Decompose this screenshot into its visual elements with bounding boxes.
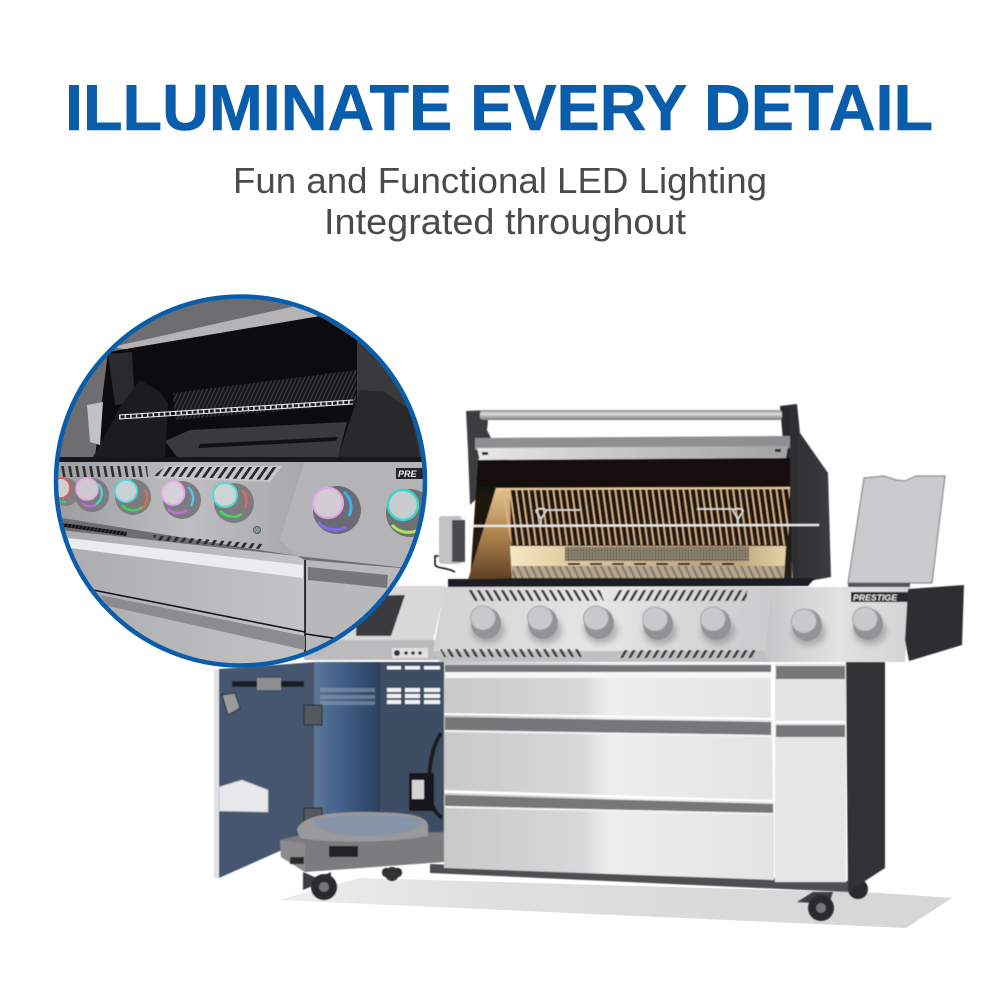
warming rack — [496, 488, 790, 545]
circle blue border — [56, 296, 425, 666]
inset base line — [50, 457, 435, 463]
inset rotisserie — [119, 400, 353, 419]
lower drawer — [444, 793, 774, 880]
inset firebox — [95, 316, 368, 457]
upper vents — [468, 590, 747, 601]
rotisserie motor — [435, 516, 465, 572]
left lit wall — [468, 488, 512, 580]
top drawer — [444, 662, 771, 718]
inset badge: PRE — [398, 469, 418, 479]
cabinet dark side — [846, 662, 885, 892]
subtitle: Fun and Functional LED Lighting — [233, 160, 767, 201]
hood base — [448, 578, 815, 587]
inset badge — [396, 468, 423, 479]
hinges — [304, 705, 322, 823]
floor shadow — [278, 878, 952, 928]
interior vents — [387, 666, 440, 704]
inset upper vents — [60, 466, 282, 482]
middle drawer — [444, 715, 773, 800]
end cap — [905, 585, 964, 661]
inset door face — [60, 530, 305, 665]
rack hangers — [536, 509, 743, 526]
firebox interior — [470, 458, 792, 582]
inset hood left — [108, 352, 135, 405]
lid strip — [477, 446, 788, 461]
inset burner screw — [254, 526, 260, 534]
heat shield — [510, 546, 786, 578]
regulator — [409, 773, 434, 811]
shelf control unit — [392, 648, 428, 658]
drawers — [444, 662, 846, 882]
lid handle — [480, 410, 782, 420]
inset handle — [68, 538, 303, 578]
inset left firewall — [93, 380, 168, 457]
grill hood — [435, 404, 831, 587]
prestige badge: PRESTIGE — [853, 592, 897, 602]
lid band — [475, 436, 790, 450]
pull-out tray and pan — [280, 812, 444, 872]
inset drawer gap — [94, 560, 334, 652]
cabinet interior — [304, 662, 444, 848]
main control panel — [433, 587, 771, 662]
inset led knobs — [52, 478, 434, 537]
inset rear rack — [173, 370, 357, 420]
zoom circle inset — [50, 290, 435, 675]
lid right side — [780, 404, 831, 584]
inset left panel — [50, 462, 304, 556]
lower vents — [440, 649, 757, 658]
inset motor — [87, 402, 103, 445]
inset background — [60, 298, 401, 652]
open door — [214, 662, 316, 878]
inset right panel — [279, 462, 430, 568]
rotisserie rod — [470, 525, 819, 526]
right knobs — [792, 607, 887, 646]
door holder box — [219, 780, 268, 812]
subtitle — [233, 160, 767, 242]
inset lid band — [116, 306, 318, 350]
inset heat shield — [165, 422, 347, 457]
right door — [775, 723, 846, 882]
shelf touch screen — [356, 595, 405, 636]
title: ILLUMINATE EVERY DETAIL — [65, 71, 933, 144]
lid left side — [466, 410, 492, 505]
inset right firewall — [338, 390, 420, 457]
right small drawer — [775, 664, 846, 721]
main knobs — [470, 606, 735, 645]
right control panel — [764, 585, 964, 662]
subtitle: Integrated throughout — [324, 201, 686, 242]
grill illustration — [214, 404, 964, 921]
inset top right hood — [357, 340, 425, 457]
left side shelf — [300, 586, 446, 660]
casters — [303, 867, 868, 921]
raised side burner lid — [848, 476, 945, 587]
door bracket — [222, 678, 304, 715]
cabinet base rail — [430, 864, 848, 892]
gas hose — [429, 733, 442, 818]
inset lower handle — [100, 595, 305, 650]
inset lower vents — [63, 523, 262, 549]
inset right drawer — [306, 560, 400, 651]
